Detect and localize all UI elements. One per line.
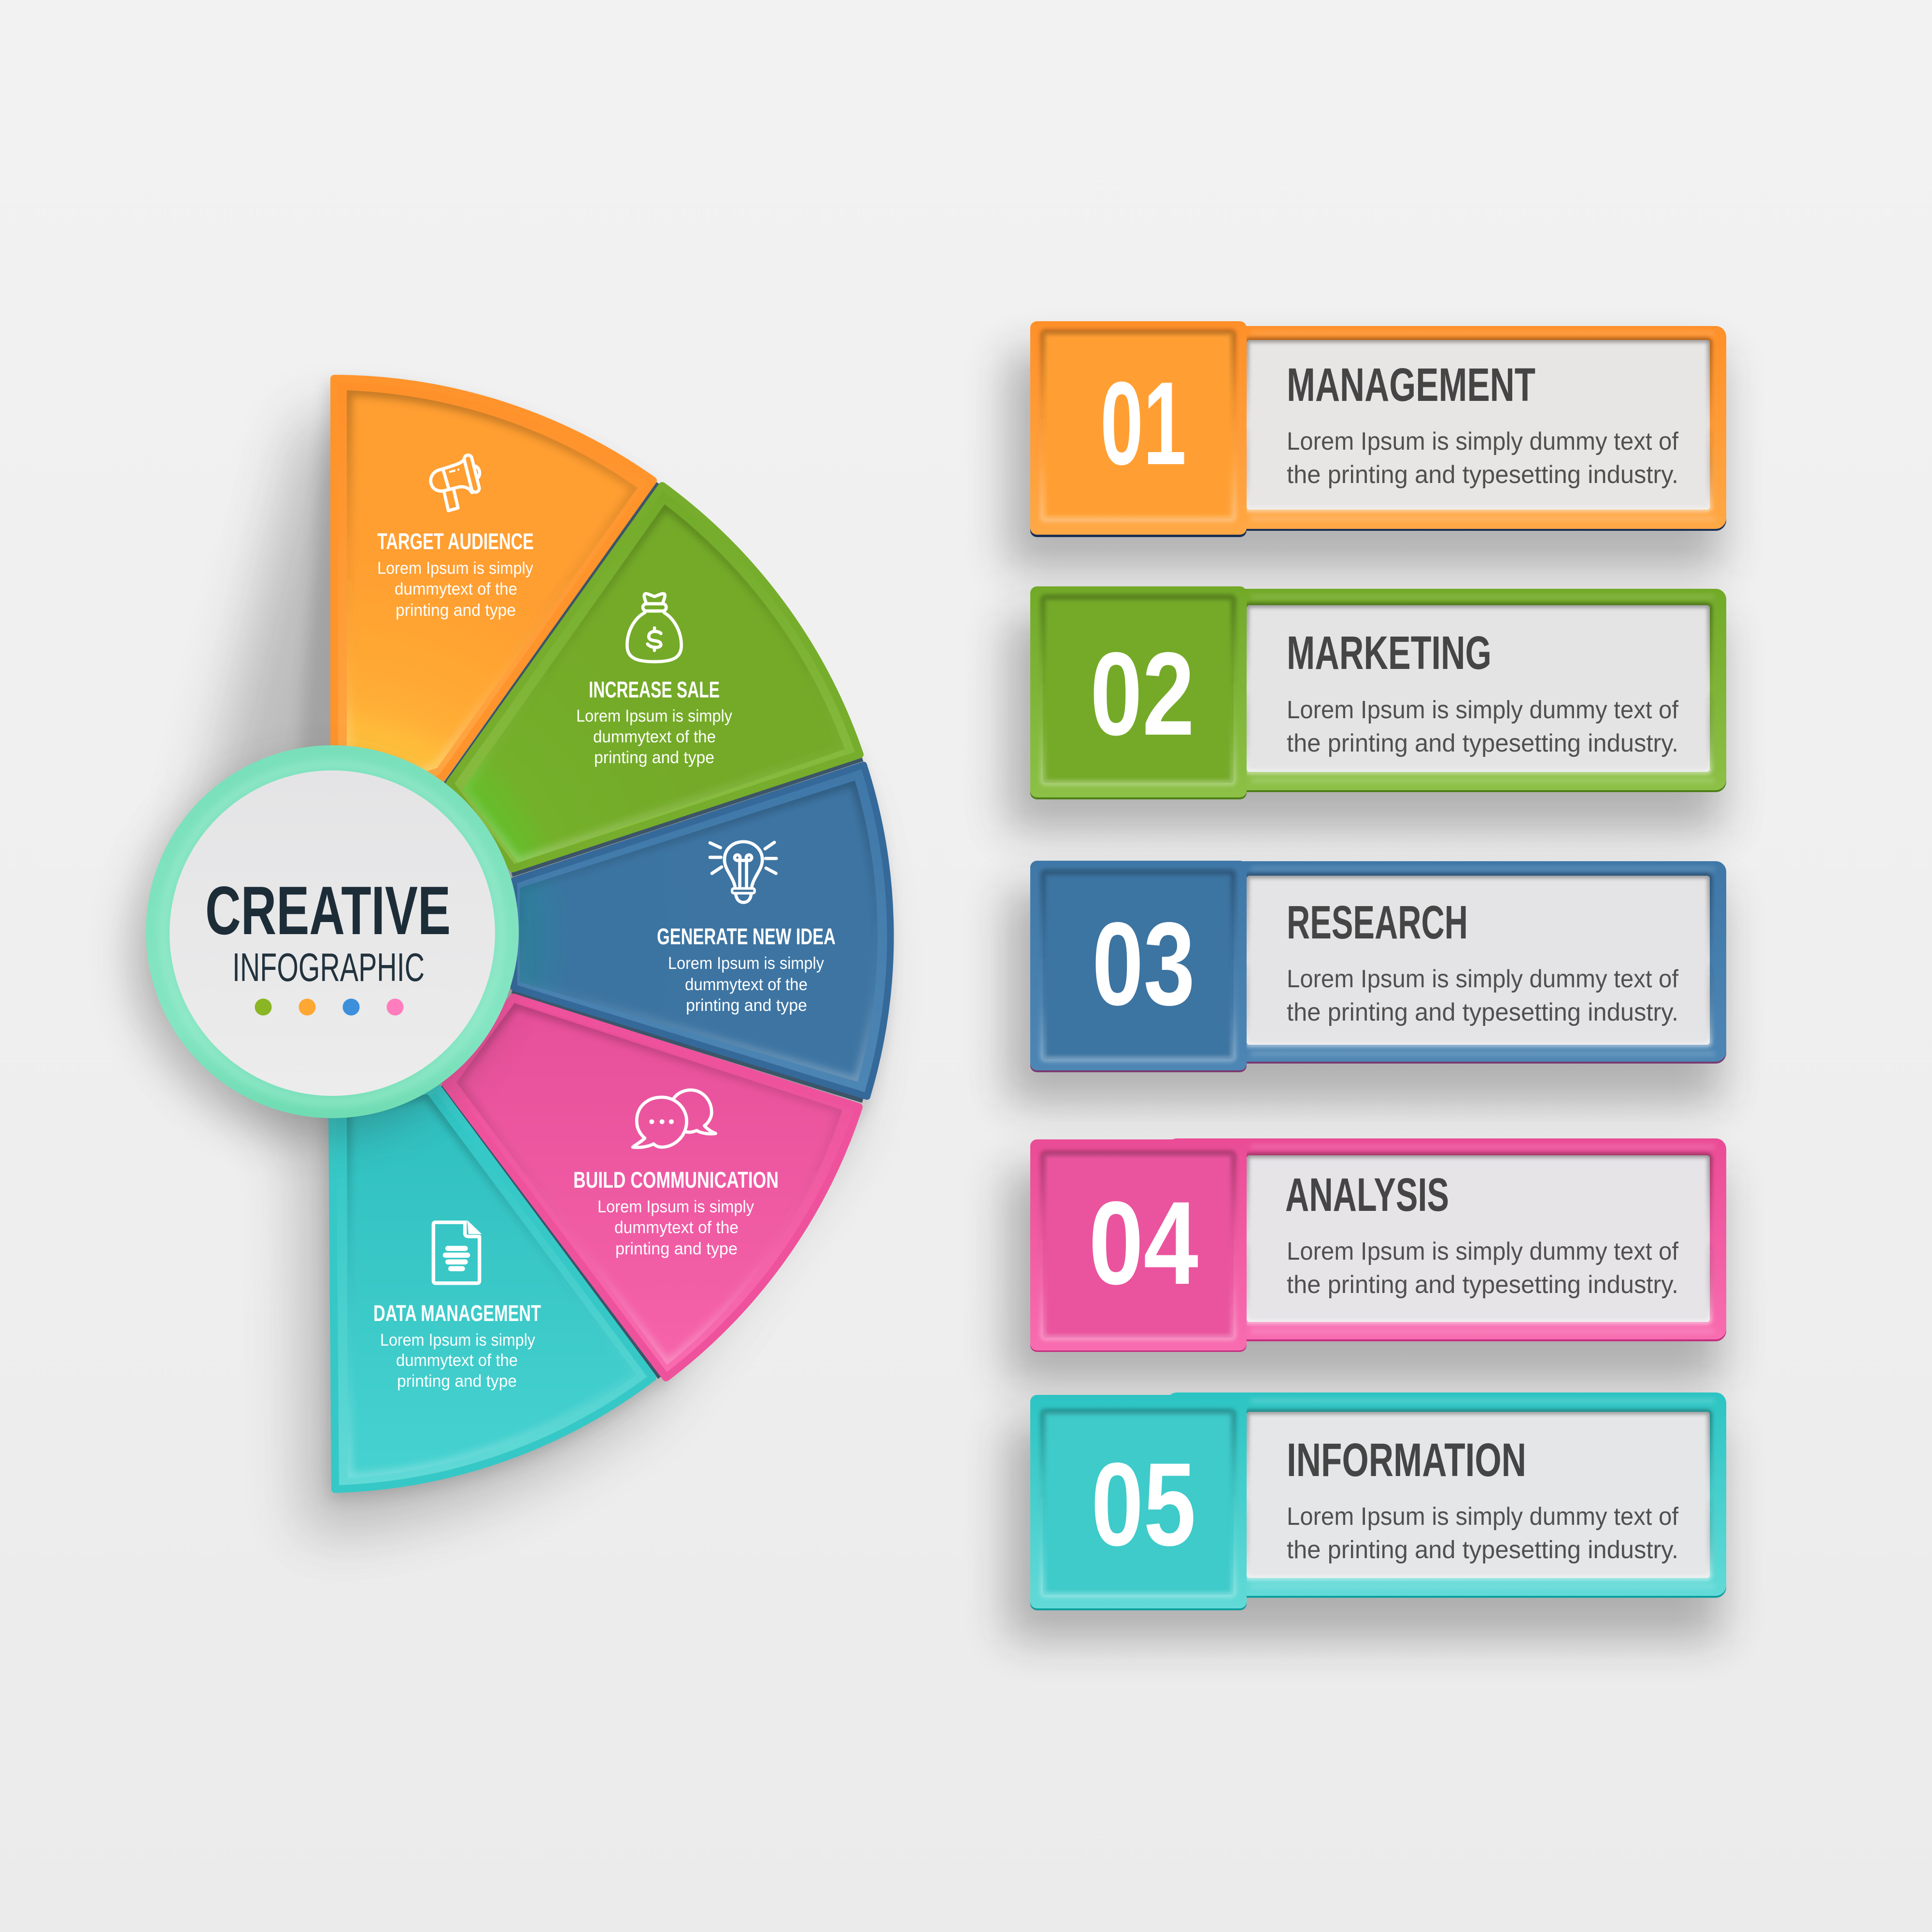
body text: the printing and typesetting industry. <box>1287 998 1678 1026</box>
number: 04 <box>1089 1177 1198 1309</box>
icon: light bulb <box>710 842 776 902</box>
title: CREATIVE <box>205 872 451 949</box>
wedge: increase sale <box>450 486 860 868</box>
body text <box>1287 965 1679 1026</box>
body text: Lorem Ipsum is simply dummy text of <box>1287 965 1679 993</box>
label: data management <box>373 1300 541 1391</box>
panel: 01 management <box>1007 321 1726 570</box>
panel: 03 research <box>1007 861 1726 1104</box>
label: generate new idea: GENERATE NEW IDEA <box>657 923 836 949</box>
label: build communication: dummytext of the <box>614 1218 739 1237</box>
label: target audience: printing and type <box>396 601 516 620</box>
icon: chat bubbles <box>633 1090 716 1148</box>
label: increase sale <box>576 677 732 767</box>
panel: 05 information <box>1007 1392 1726 1640</box>
panel: 04 analysis <box>1007 1138 1726 1384</box>
body text: Lorem Ipsum is simply dummy text of <box>1287 696 1679 724</box>
number: 01 <box>1100 357 1186 489</box>
label: generate new idea: dummytext of the <box>685 975 808 994</box>
body text: the printing and typesetting industry. <box>1287 1271 1678 1299</box>
body text <box>1287 427 1679 489</box>
wedge: target audience <box>334 379 653 821</box>
body text: Lorem Ipsum is simply dummy text of <box>1287 427 1679 455</box>
label: generate new idea <box>657 923 836 1015</box>
label: generate new idea: Lorem Ipsum is simply <box>668 954 824 973</box>
wedge: generate new idea <box>514 765 891 1096</box>
body text: the printing and typesetting industry. <box>1287 729 1678 757</box>
label: generate new idea: printing and type <box>686 996 807 1015</box>
title: INFOGRAPHIC <box>232 945 425 990</box>
label: build communication <box>573 1167 779 1258</box>
wedge: data management <box>332 1089 653 1489</box>
label: increase sale: INCREASE SALE <box>589 677 720 702</box>
label: target audience <box>377 528 534 620</box>
title <box>205 872 451 990</box>
body text: Lorem Ipsum is simply dummy text of <box>1287 1503 1679 1531</box>
label: increase sale: printing and type <box>594 748 714 767</box>
colour dots <box>255 999 404 1015</box>
body text <box>1287 1237 1679 1299</box>
label: increase sale: Lorem Ipsum is simply <box>576 707 732 725</box>
body text <box>1287 1503 1679 1564</box>
panel: 02 marketing <box>1007 586 1726 831</box>
label: data management: Lorem Ipsum is simply <box>380 1331 535 1350</box>
icon: document <box>433 1220 482 1283</box>
heading: MARKETING <box>1287 626 1492 679</box>
heading: INFORMATION <box>1287 1434 1526 1486</box>
wedge: build communication <box>446 997 859 1378</box>
heading: RESEARCH <box>1287 896 1468 949</box>
label: data management: printing and type <box>397 1372 517 1391</box>
panel: fan diagram <box>332 379 891 1489</box>
number: 02 <box>1090 627 1194 760</box>
icon: megaphone <box>431 455 480 511</box>
number: 05 <box>1091 1438 1196 1570</box>
body text: the printing and typesetting industry. <box>1287 1536 1678 1564</box>
fan shadow <box>164 383 890 1534</box>
label: build communication: Lorem Ipsum is simply <box>597 1197 754 1216</box>
label: data management: DATA MANAGEMENT <box>373 1300 541 1326</box>
icon: money bag <box>627 594 682 662</box>
label: increase sale: dummytext of the <box>593 727 716 746</box>
label: target audience: dummytext of the <box>395 580 517 598</box>
panel: centre circle <box>130 745 519 1137</box>
number: 03 <box>1092 897 1195 1030</box>
label: target audience: Lorem Ipsum is simply <box>377 559 533 578</box>
label: target audience: TARGET AUDIENCE <box>377 528 534 554</box>
body text <box>1287 696 1679 757</box>
heading: ANALYSIS <box>1285 1168 1449 1221</box>
label: build communication: printing and type <box>615 1239 738 1258</box>
infographic canvas <box>110 321 1753 1671</box>
body text: the printing and typesetting industry. <box>1287 461 1678 489</box>
label: data management: dummytext of the <box>396 1351 518 1370</box>
label: build communication: BUILD COMMUNICATION <box>573 1167 779 1193</box>
body text: Lorem Ipsum is simply dummy text of <box>1287 1237 1679 1265</box>
heading: MANAGEMENT <box>1287 358 1535 411</box>
